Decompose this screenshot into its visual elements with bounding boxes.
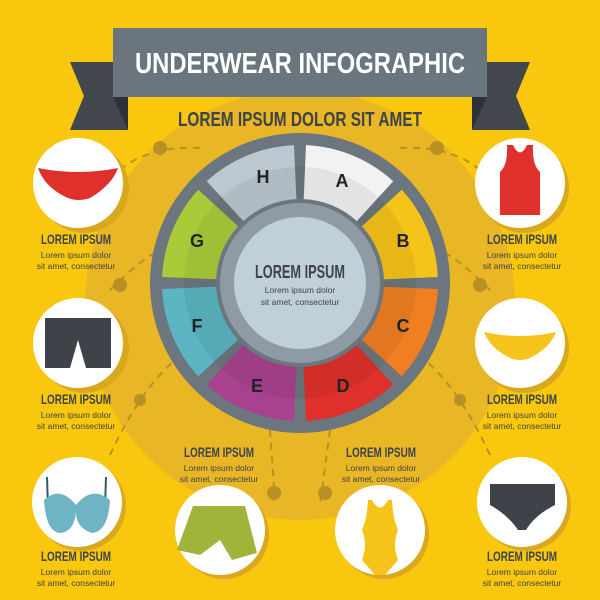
labels: sit amet, consectetur: [37, 578, 115, 588]
labels: Lorem ipsum dolor: [346, 463, 416, 473]
icon: yellow swimsuit: [362, 500, 398, 575]
title banner: UNDERWEAR INFOGRAPHIC: [135, 48, 465, 80]
labels: sit amet, consectetur: [37, 421, 115, 431]
labels: Lorem ipsum dolor: [41, 410, 111, 420]
icon: red briefs: [38, 168, 118, 200]
labels: [37, 231, 561, 588]
labels: LOREM IPSUM: [487, 231, 557, 247]
wheel: LOREM IPSUM: [255, 262, 345, 282]
labels: sit amet, consectetur: [342, 474, 420, 484]
icon: dark briefs: [490, 484, 555, 530]
labels: LOREM IPSUM: [487, 548, 557, 564]
subtitle: LOREM IPSUM DOLOR SIT AMET: [178, 109, 422, 131]
wheel: D: [336, 376, 350, 396]
wheel: C: [396, 316, 410, 336]
wheel: E: [251, 376, 263, 396]
wheel: G: [190, 231, 204, 251]
icon circles: [36, 143, 571, 579]
icon: red tank top: [500, 145, 540, 215]
wheel: F: [192, 316, 202, 336]
labels: Lorem ipsum dolor: [184, 463, 254, 473]
labels: LOREM IPSUM: [41, 548, 111, 564]
labels: Lorem ipsum dolor: [41, 567, 111, 577]
icon: dark boxers: [45, 318, 111, 368]
labels: sit amet, consectetur: [37, 261, 115, 271]
labels: LOREM IPSUM: [41, 391, 111, 407]
icon: yellow panties: [484, 332, 556, 360]
labels: Lorem ipsum dolor: [487, 250, 557, 260]
labels: sit amet, consectetur: [483, 261, 561, 271]
wheel: H: [256, 167, 270, 187]
labels: Lorem ipsum dolor: [487, 567, 557, 577]
labels: Lorem ipsum dolor: [487, 410, 557, 420]
icon: green shorts: [177, 506, 257, 560]
wheel: A: [336, 171, 348, 191]
wheel: sit amet, consectetur: [261, 297, 339, 307]
labels: sit amet, consectetur: [483, 578, 561, 588]
labels: LOREM IPSUM: [487, 391, 557, 407]
labels: LOREM IPSUM: [346, 444, 416, 460]
labels: sit amet, consectetur: [180, 474, 258, 484]
labels: Lorem ipsum dolor: [41, 250, 111, 260]
dashed connectors: [110, 148, 490, 505]
labels: LOREM IPSUM: [184, 444, 254, 460]
labels: LOREM IPSUM: [41, 231, 111, 247]
title banner: [70, 28, 530, 130]
wheel: B: [396, 231, 410, 251]
wheel: [137, 120, 463, 446]
wheel: Lorem ipsum dolor: [265, 285, 335, 295]
icon: blue bra: [44, 477, 110, 533]
background circle: [85, 90, 515, 520]
labels: sit amet, consectetur: [483, 421, 561, 431]
